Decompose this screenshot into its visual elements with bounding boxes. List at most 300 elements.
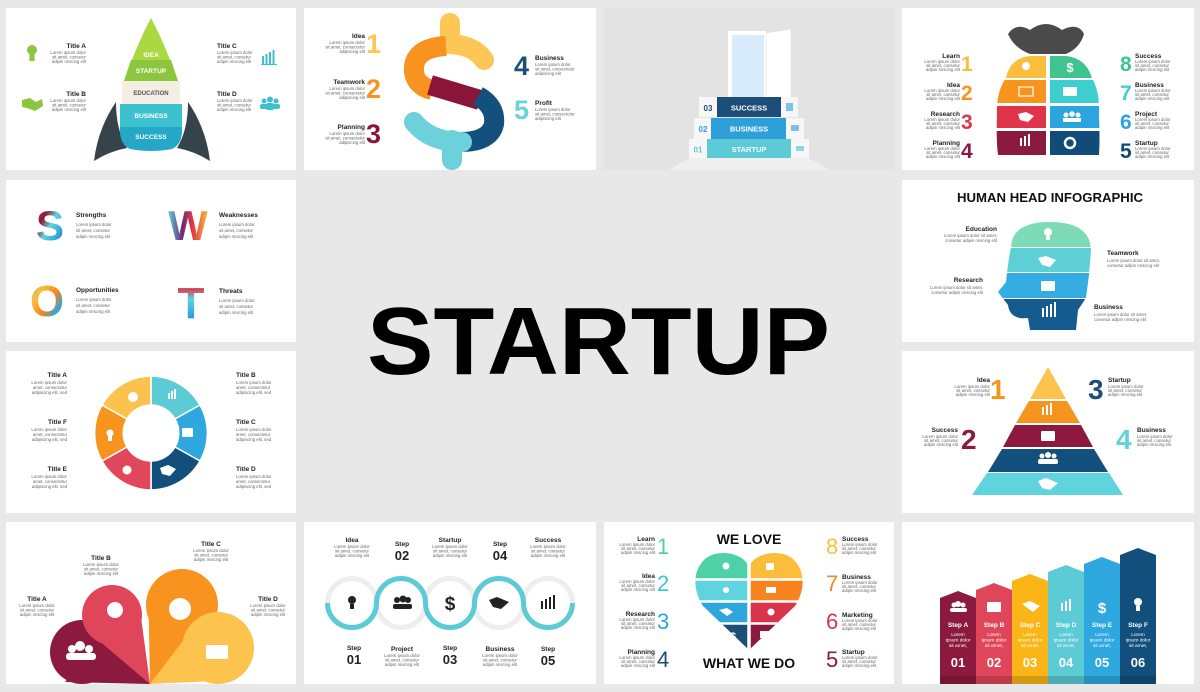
numbers 1-8: 8 — [1120, 53, 1132, 76]
text: left labels: adipiscing elit — [339, 140, 366, 145]
bar labels: sit amet, — [1093, 643, 1111, 649]
text: Title A: adipin nnscing elit — [52, 59, 87, 64]
gray rings — [328, 578, 572, 628]
heading: HUMAN HEAD INFOGRAPHIC — [957, 191, 1143, 205]
bar labels: Step B — [984, 622, 1005, 629]
step 02 business — [694, 118, 804, 139]
text: heart right labels: Success — [842, 536, 869, 543]
bar labels: 03 — [1023, 655, 1037, 670]
door — [728, 29, 791, 101]
text: titles B C D: amet, consectetur — [236, 385, 271, 390]
text: titles B C D: adipiscing elit, sed — [236, 390, 272, 395]
panel: cycle — [6, 351, 296, 513]
text: Title C: Title C — [217, 43, 237, 50]
text: business: Lorem ipsum dolor sit amet, — [1094, 312, 1147, 317]
text: bag left labels: adipin nnscing elit — [926, 125, 961, 130]
rocket body: IDEA — [143, 52, 159, 59]
text: heart right labels: adipin nnscing elit — [842, 626, 877, 631]
text: Title D — [217, 91, 253, 112]
bar labels: ipsum dolor — [1018, 638, 1043, 644]
text: bag right labels: adipin nnscing elit — [1135, 67, 1170, 72]
numbers 1-5: 5 — [514, 95, 529, 125]
text: bag left labels: Lorem ipsum dolor — [924, 59, 961, 64]
dollar sign pieces — [414, 23, 494, 160]
text: strengths: Strengths — [76, 212, 107, 219]
text: pyramid right: Startup — [1108, 377, 1131, 384]
text: heart right labels: sit amet, consetur — [842, 546, 876, 551]
text: petal titles: adipin nnscing elit — [251, 612, 286, 617]
text: titles B C D: Lorem ipsum dolor — [236, 427, 272, 432]
panel: heart — [604, 522, 894, 684]
bar labels: sit amet, — [1129, 643, 1147, 649]
text: top labels — [334, 537, 566, 563]
text: Title C: Lorem ipsum dolor — [217, 50, 253, 55]
text: bag right labels: Lorem ipsum dolor — [1135, 88, 1171, 93]
text: petal titles: Lorem ipsum dolor — [19, 603, 55, 608]
bar labels: Step C — [1020, 622, 1041, 629]
bar labels: ipsum dolor — [982, 638, 1007, 644]
text: heart right labels: adipin nnscing elit — [842, 663, 877, 668]
text: left labels: Idea — [352, 33, 365, 40]
numbers 1-8: 8 — [826, 534, 838, 559]
text: bag right labels: sit amet, consetur — [1135, 63, 1169, 68]
text: left labels: sit amet, consectetur — [325, 44, 366, 50]
text: right labels: Business — [535, 55, 564, 62]
text: titles A E F: amet, consectetur — [33, 432, 68, 437]
text: research: consetur adipin nnscing elit — [931, 290, 984, 295]
text: teamwork — [1107, 250, 1160, 268]
text: education — [944, 226, 998, 243]
bag grid: $ — [1066, 60, 1074, 75]
text: heart right labels — [842, 536, 878, 668]
text: heart left labels: adipin nnscing elit — [621, 550, 656, 555]
text: petal titles: sit amet, consetur — [251, 608, 286, 612]
text: Title C: sit amet, consetur — [217, 54, 251, 60]
text: pyramid right: adipin nnscing elit — [1108, 392, 1143, 397]
text: pyramid left: sit amet, consetur — [924, 438, 959, 443]
numbers 1-5: 3 — [366, 119, 381, 149]
text: opportunities: Lorem ipsum dolor — [76, 297, 112, 302]
text: top labels: Startup — [439, 537, 461, 544]
text: Title B: adipin nnscing elit — [52, 107, 87, 112]
text: titles A E F: adipiscing elit, sed — [32, 390, 68, 395]
text: pyramid right: sit amet, consetur — [1108, 388, 1142, 393]
text: petal titles: adipin nnscing elit — [20, 612, 55, 617]
text: top labels: Lorem ipsum dolor — [432, 544, 468, 549]
numbers 1-5: 4 — [514, 51, 529, 81]
text: titles B C D: amet, consectetur — [236, 479, 271, 484]
text: bag right labels: sit amet, consetur — [1135, 121, 1169, 126]
text: titles A E F: adipiscing elit, sed — [32, 437, 68, 442]
rocket body: STARTUP — [136, 68, 167, 75]
ring icons — [106, 389, 193, 476]
text: petal titles: Lorem ipsum dolor — [250, 603, 286, 608]
text: right labels: adipiscing elit — [535, 116, 562, 121]
text: bottom labels: Step — [443, 645, 457, 652]
numbers 1-8: 6 — [1120, 111, 1132, 134]
text: top labels: adipin nnscing elit — [433, 553, 468, 558]
numbers 1-8: 5 — [1120, 140, 1132, 163]
floor — [669, 158, 830, 170]
text: heart right labels: Startup — [842, 649, 865, 656]
text: Title A: Title A — [66, 43, 86, 50]
text: pyramid left: sit amet, consetur — [956, 388, 991, 393]
text: titles B C D: adipiscing elit, sed — [236, 437, 272, 442]
text: bag left labels: sit amet, consetur — [926, 92, 961, 97]
bar labels — [946, 622, 1151, 670]
bar labels: 05 — [1095, 655, 1109, 670]
text: top labels: adipin nnscing elit — [531, 553, 566, 558]
text: titles A E F: Title F — [48, 419, 67, 426]
text: bag left labels: Lorem ipsum dolor — [924, 117, 961, 122]
text: weaknesses: Weaknesses — [219, 212, 258, 219]
text: top labels: Lorem ipsum dolor — [530, 544, 566, 549]
text: bottom labels: 01 — [347, 652, 361, 667]
text: top labels: sit amet, consetur — [531, 548, 566, 554]
text: weaknesses: adipin nnscing elit — [219, 234, 254, 239]
text: pyramid left: Idea — [977, 377, 990, 384]
text: right labels: sit amet, consectetur — [535, 112, 575, 116]
numbers 1-8: 3 — [961, 111, 973, 134]
text: right labels: Lorem ipsum dolor — [535, 62, 571, 67]
text: bag left labels: Learn — [942, 53, 960, 60]
letter O: O — [30, 277, 64, 326]
text: heart left labels: Idea — [642, 573, 655, 580]
panel: pyramid — [902, 351, 1194, 513]
text: research: Research — [954, 277, 983, 284]
numbers 1-4: 2 — [961, 424, 977, 455]
bar labels: Step D — [1056, 622, 1077, 629]
text: titles A E F: amet, consectetur — [33, 479, 68, 484]
text: Title D: Lorem ipsum dolor — [217, 98, 253, 103]
panel: money bag — [902, 8, 1194, 170]
text: heart left labels: sit amet, consetur — [621, 583, 656, 588]
icon: chart — [261, 50, 277, 65]
text: opportunities — [76, 287, 119, 314]
bar labels: 01 — [951, 655, 965, 670]
text: petal titles: sit amet, consetur — [84, 566, 119, 572]
text: petal titles: adipin nnscing elit — [84, 571, 119, 576]
text: threats — [219, 288, 255, 315]
numbers 1-8 — [657, 534, 838, 672]
text: bag left labels: Lorem ipsum dolor — [924, 146, 961, 151]
text: titles A E F: Lorem ipsum dolor — [31, 427, 68, 432]
text: heart left labels: adipin nnscing elit — [621, 625, 656, 630]
panel: SWOT — [6, 180, 296, 342]
numbers 1-4 — [961, 374, 1132, 455]
text: left labels: Teamwork — [333, 79, 365, 86]
numbers 1-8: 2 — [961, 82, 973, 105]
text: left labels: Planning — [338, 124, 365, 131]
numbers 1-5: 1 — [366, 29, 381, 59]
text: strengths: Lorem ipsum dolor — [76, 222, 112, 227]
text: heart right labels: Lorem ipsum dolor — [842, 618, 878, 623]
text: titles A E F: Title E — [48, 466, 68, 473]
text: titles B C D — [236, 372, 272, 489]
text: top labels: 04 — [493, 548, 508, 563]
text: top labels: sit amet, consetur — [335, 548, 370, 554]
text: bag left labels: Planning — [933, 140, 960, 147]
numbers 1-5: 2 — [366, 74, 381, 104]
bar icons — [950, 598, 1142, 617]
icon: bulb — [27, 45, 37, 61]
text: bottom labels: Lorem ipsum dolor — [482, 653, 518, 658]
step 03 success — [699, 97, 798, 117]
panel: steps wave — [304, 522, 596, 684]
panel: arrow bars — [902, 522, 1194, 684]
bar labels: 06 — [1131, 655, 1145, 670]
text: heart left labels: Lorem ipsum dolor — [619, 617, 656, 622]
text: heart left labels: sit amet, consetur — [621, 621, 656, 626]
text: Title B: Title B — [66, 91, 86, 98]
text: petal titles: Lorem ipsum dolor — [83, 562, 119, 567]
text: top labels: Step — [493, 541, 507, 548]
rocket body: EDUCATION — [133, 91, 169, 97]
text: pyramid left: Lorem ipsum dolor — [922, 434, 959, 439]
text: strengths — [76, 212, 112, 239]
panel: stairs and door — [604, 8, 894, 170]
step 03 success: 03 — [704, 104, 713, 113]
text: right labels: Lorem ipsum dolor — [535, 107, 571, 112]
text: heart left labels: Lorem ipsum dolor — [619, 542, 656, 547]
text: bottom labels — [347, 645, 555, 668]
letter T: T — [178, 279, 205, 328]
step icons: $ — [445, 594, 456, 615]
pyramid layers — [972, 367, 1123, 495]
text: heart left labels: sit amet, consetur — [621, 659, 656, 664]
text: bottom labels: Step — [541, 646, 555, 653]
text: bag right labels — [1135, 53, 1171, 159]
text: titles B C D: Title B — [236, 372, 256, 379]
heading: we love: WE LOVE — [717, 531, 781, 547]
text: business: Business — [1094, 304, 1123, 311]
text: left labels: Lorem ipsum dolor — [329, 86, 366, 91]
text: teamwork: consetur adipin nnscing elit — [1107, 263, 1160, 268]
bar labels: ipsum dolor — [1054, 638, 1079, 644]
bar labels: Lorem — [951, 632, 965, 638]
text: threats: Threats — [219, 288, 243, 295]
text: opportunities: adipin nnscing elit — [76, 309, 111, 314]
head bands — [998, 222, 1091, 330]
text: Title A: Lorem ipsum dolor — [50, 50, 87, 55]
step 01 startup — [689, 139, 809, 158]
numbers 1-8: 5 — [826, 647, 838, 672]
text: threats: adipin nnscing elit — [219, 310, 254, 315]
bar labels: 02 — [987, 655, 1001, 670]
text: heart right labels: Lorem ipsum dolor — [842, 580, 878, 585]
text: bag right labels: sit amet, consetur — [1135, 150, 1169, 155]
text: titles A E F: amet, consectetur — [33, 385, 68, 390]
text: titles B C D: Lorem ipsum dolor — [236, 474, 272, 479]
text: bag left labels: Idea — [947, 82, 960, 89]
text: bag left labels: adipin nnscing elit — [926, 96, 961, 101]
text: petal titles: Title C — [201, 541, 221, 548]
text: pyramid right: sit amet, consetur — [1137, 438, 1171, 443]
text: titles B C D: adipiscing elit, sed — [236, 484, 272, 489]
text: bag left labels: Research — [931, 111, 960, 118]
heading: what we do: WHAT WE DO — [703, 655, 795, 671]
panel: rocket — [6, 8, 296, 170]
heart grid — [695, 553, 803, 649]
text: heart left labels: adipin nnscing elit — [621, 663, 656, 668]
text: heart right labels: sit amet, consetur — [842, 659, 876, 664]
text: bag right labels: Project — [1135, 111, 1158, 118]
text: strengths: sit amet, consetur — [76, 228, 110, 233]
text: bag left labels: sit amet, consetur — [926, 63, 961, 68]
text: heart left labels: Lorem ipsum dolor — [619, 655, 656, 660]
bar labels: Lorem — [987, 632, 1001, 638]
text: threats: Lorem ipsum dolor — [219, 298, 255, 303]
text: bag right labels: adipin nnscing elit — [1135, 125, 1170, 130]
text: left labels: sit amet, consectetur — [325, 90, 366, 96]
text: petal titles: Lorem ipsum dolor — [193, 548, 229, 553]
bar labels: Step A — [948, 622, 968, 629]
text: bag left labels: adipin nnscing elit — [926, 154, 961, 159]
text: bag left labels: sit amet, consetur — [926, 121, 961, 126]
text: opportunities: Opportunities — [76, 287, 119, 294]
bars — [940, 548, 1156, 684]
text: left labels: sit amet, consectetur — [325, 136, 366, 140]
text: bottom labels: Project — [391, 646, 414, 653]
heart icons: $ — [730, 631, 736, 643]
text: left labels: Lorem ipsum dolor — [329, 40, 366, 45]
rocket body: SUCCESS — [135, 134, 167, 141]
text: education: Education — [966, 226, 997, 233]
panel: dollar puzzle — [304, 8, 596, 170]
text: right labels: Profit — [535, 100, 553, 107]
text: education: Lorem ipsum dolor sit amet, — [944, 233, 997, 238]
text: bag right labels: sit amet, consetur — [1135, 92, 1169, 97]
text: heart left labels: adipin nnscing elit — [621, 587, 656, 592]
bar labels: sit amet, — [949, 643, 967, 649]
numbers 1-8: 7 — [826, 571, 838, 596]
heart icons — [719, 562, 776, 643]
text: bottom labels: Step — [347, 645, 361, 652]
text: business — [1094, 304, 1147, 322]
text: left labels: adipiscing elit — [339, 95, 366, 100]
text: teamwork: Teamwork — [1107, 250, 1139, 257]
rocket body: BUSINESS — [134, 113, 168, 120]
text: Title D: Title D — [217, 91, 237, 98]
text: education: consetur adipin nnscing elit — [945, 238, 998, 243]
text: strengths: adipin nnscing elit — [76, 234, 111, 239]
text: heart left labels: sit amet, consetur — [621, 546, 656, 551]
text: Title C: adipin nnscing elit — [217, 59, 252, 64]
numbers 1-8: 1 — [961, 53, 973, 76]
text: titles B C D: Lorem ipsum dolor — [236, 380, 272, 385]
text: pyramid right: Lorem ipsum dolor — [1137, 434, 1173, 439]
text: bag left labels: adipin nnscing elit — [926, 67, 961, 72]
step 01 startup: STARTUP — [732, 145, 766, 154]
text: bag right labels: adipin nnscing elit — [1135, 154, 1170, 159]
text: bag right labels: Success — [1135, 53, 1162, 60]
text: titles A E F: adipiscing elit, sed — [32, 484, 68, 489]
bar labels: sit amet, — [1057, 643, 1075, 649]
text: bag right labels: adipin nnscing elit — [1135, 96, 1170, 101]
text: titles B C D: amet, consectetur — [236, 432, 271, 437]
text: top labels: Lorem ipsum dolor — [334, 544, 370, 549]
text: petal titles: adipin nnscing elit — [194, 557, 229, 562]
text: weaknesses: sit amet, consetur — [219, 228, 253, 233]
text: pyramid left: adipin nnscing elit — [956, 392, 991, 397]
text: Title B: sit amet, consetur — [52, 102, 87, 108]
text: petal titles: Title B — [91, 555, 111, 562]
text: pyramid left: Lorem ipsum dolor — [954, 384, 991, 389]
text: bottom labels: sit amet, consetur — [385, 658, 420, 662]
text: pyramid right: Lorem ipsum dolor — [1108, 384, 1144, 389]
text: bottom labels: adipin nnscing elit — [385, 662, 420, 667]
text: heart right labels: Lorem ipsum dolor — [842, 655, 878, 660]
text: heart right labels: Lorem ipsum dolor — [842, 542, 878, 547]
text: right labels: adipiscing elit — [535, 71, 562, 76]
text: pyramid left: Success — [932, 427, 958, 434]
text: opportunities: sit amet, consetur — [76, 303, 110, 308]
text: top labels: adipin nnscing elit — [335, 553, 370, 558]
text: heart right labels: Marketing — [842, 612, 873, 619]
bag grid — [996, 56, 1100, 155]
text: heart left labels: Planning — [628, 649, 655, 656]
text: bag right labels: Business — [1135, 82, 1164, 89]
text: Title D: sit amet, consetur — [217, 102, 251, 108]
text: bag left labels: sit amet, consetur — [926, 150, 961, 155]
numbers 1-4: 4 — [1116, 424, 1132, 455]
text: left labels: Lorem ipsum dolor — [329, 131, 366, 136]
text: pyramid left: adipin nnscing elit — [924, 442, 959, 447]
icon: people — [260, 96, 280, 110]
rocket body — [120, 18, 182, 151]
text: bottom labels: Business — [486, 646, 515, 653]
text: heart left labels: Research — [626, 611, 655, 618]
numbers 1-8: 4 — [657, 647, 669, 672]
bar labels: Lorem — [1023, 632, 1037, 638]
text: heart left labels — [619, 536, 656, 668]
text: right labels — [535, 55, 575, 121]
text: bottom labels: 03 — [443, 652, 457, 667]
text: Title C — [217, 43, 253, 64]
text: titles A E F: Lorem ipsum dolor — [31, 380, 68, 385]
bar labels: 04 — [1059, 655, 1074, 670]
panel: petals — [6, 522, 296, 684]
numbers 1-8: 6 — [826, 609, 838, 634]
text: weaknesses — [219, 212, 258, 239]
text: bag left labels: Lorem ipsum dolor — [924, 88, 961, 93]
numbers 1-4: 3 — [1088, 374, 1104, 405]
bar labels: ipsum dolor — [946, 638, 971, 644]
text: top labels: Step — [395, 541, 409, 548]
petal shapes — [50, 569, 254, 684]
text: titles A E F: Lorem ipsum dolor — [31, 474, 68, 479]
text: left labels: adipiscing elit — [339, 49, 366, 54]
text: petal titles: Title A — [27, 596, 47, 603]
text: bag right labels: Lorem ipsum dolor — [1135, 146, 1171, 151]
text: petal titles: Title D — [258, 596, 278, 603]
text: bottom labels: Lorem ipsum dolor — [384, 653, 420, 658]
text: titles B C D: Title C — [236, 419, 256, 426]
bar icons: $ — [1098, 600, 1107, 617]
text: research — [930, 277, 984, 295]
numbers 1-8: 2 — [657, 571, 669, 596]
text: bag right labels: Lorem ipsum dolor — [1135, 59, 1171, 64]
step icons — [348, 594, 555, 615]
text: teamwork: Lorem ipsum dolor sit amet, — [1107, 258, 1160, 263]
numbers 1-8: 3 — [657, 609, 669, 634]
text: bottom labels: 05 — [541, 653, 555, 668]
bar labels: Lorem — [1095, 632, 1109, 638]
text: research: Lorem ipsum dolor sit amet, — [930, 285, 983, 290]
petal icons — [66, 598, 228, 660]
text: right labels: sit amet, consectetur — [535, 66, 575, 72]
text: titles B C D: Title D — [236, 466, 256, 473]
